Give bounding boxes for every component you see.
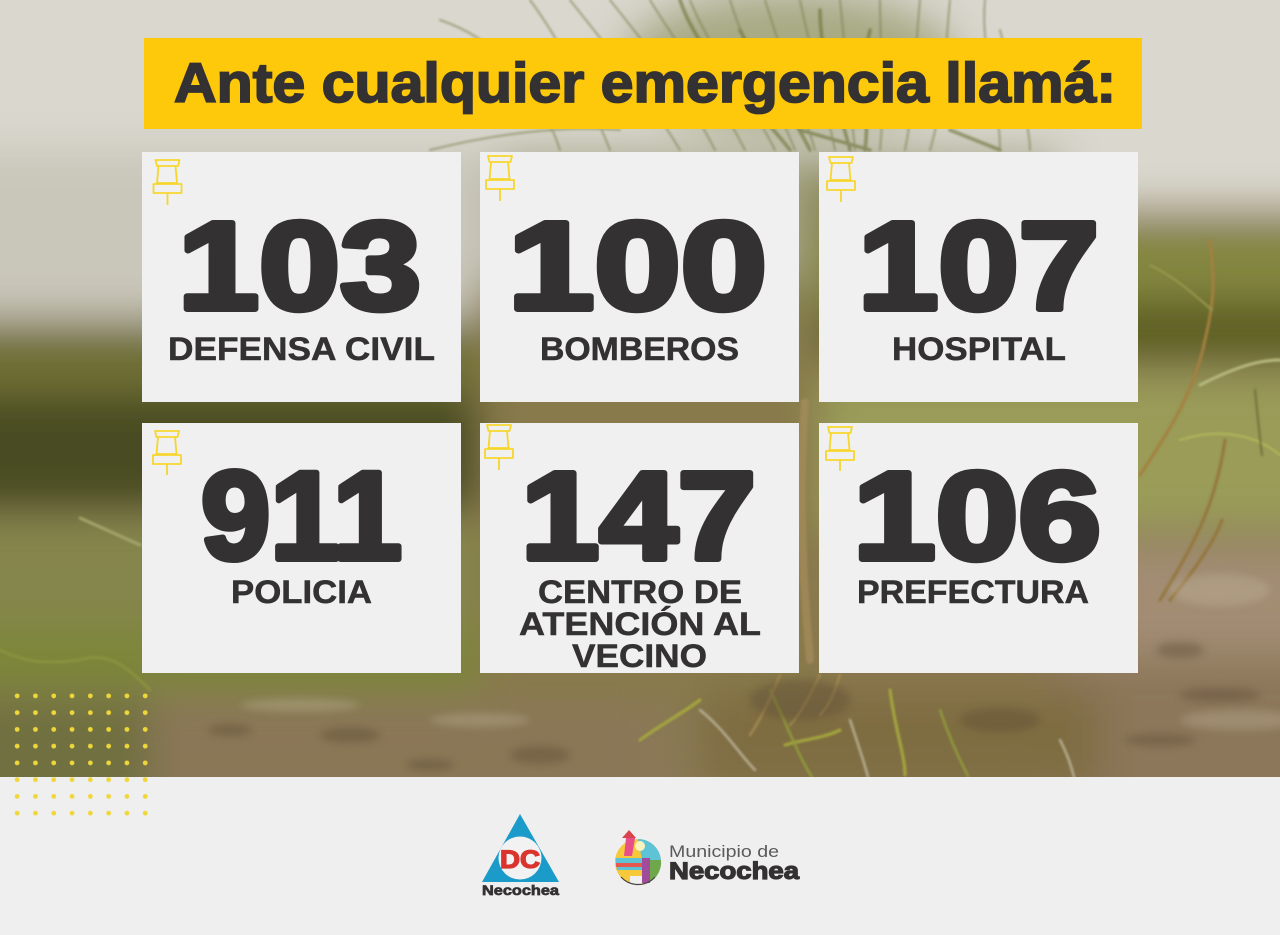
- card: 100 Bomberos: 100: [508, 197, 767, 336]
- title banner: Ante cualquier emergencia llamá:: [174, 51, 1116, 114]
- logo: Defensa Civil Necochea: [482, 814, 559, 898]
- card: 103 Defensa Civil: 103: [178, 197, 421, 336]
- dot grid decoration: [8, 688, 154, 822]
- logo: Defensa Civil Necochea: Necochea: [482, 882, 559, 898]
- icon: municipal emblem: [615, 830, 661, 885]
- icon: pushpin: [827, 157, 855, 202]
- soil texture: [208, 642, 1260, 771]
- card: 106 Prefectura: [819, 423, 1138, 673]
- icon: pushpin: [153, 431, 181, 475]
- card: 147 Centro de Atención al Vecino: ATENCIÓN AL: [519, 606, 761, 642]
- grass tuft top: [430, 0, 1030, 150]
- card: 103 Defensa Civil: DEFENSA CIVIL: [168, 331, 435, 367]
- card: 107 Hospital: HOSPITAL: [892, 331, 1066, 367]
- logo: Municipio de Necochea: Municipio de: [669, 842, 779, 861]
- card: 911 Policia: [142, 423, 461, 673]
- card: 911 Policia: POLICIA: [231, 574, 372, 610]
- icon: pushpin: [154, 160, 182, 205]
- card: 911 Policia: 911: [201, 447, 402, 586]
- card: 100 Bomberos: BOMBEROS: [540, 331, 739, 367]
- icon: pushpin: [485, 425, 513, 470]
- card: 107 Hospital: 107: [858, 197, 1099, 336]
- card: 147 Centro de Atención al Vecino: 147: [521, 447, 756, 586]
- card: 107 Hospital: [819, 152, 1138, 402]
- footer band: [0, 777, 1280, 935]
- card: 106 Prefectura: PREFECTURA: [857, 574, 1089, 610]
- card: 106 Prefectura: 106: [853, 447, 1101, 586]
- card: 100 Bomberos: [480, 152, 799, 402]
- card: 147 Centro de Atención al Vecino: [480, 423, 799, 674]
- icon: pushpin: [486, 156, 514, 201]
- card: 147 Centro de Atención al Vecino: CENTRO DE: [538, 574, 742, 610]
- card: 103 Defensa Civil: [142, 152, 461, 402]
- grass and stalks: [0, 240, 1280, 777]
- title banner: [144, 38, 1142, 129]
- logo: Defensa Civil Necochea: DC: [500, 846, 540, 874]
- icon: pushpin: [826, 427, 854, 471]
- logo: Municipio de Necochea: Necochea: [669, 858, 800, 885]
- card: 147 Centro de Atención al Vecino: VECINO: [572, 638, 707, 674]
- logo: Municipio de Necochea: [615, 830, 800, 885]
